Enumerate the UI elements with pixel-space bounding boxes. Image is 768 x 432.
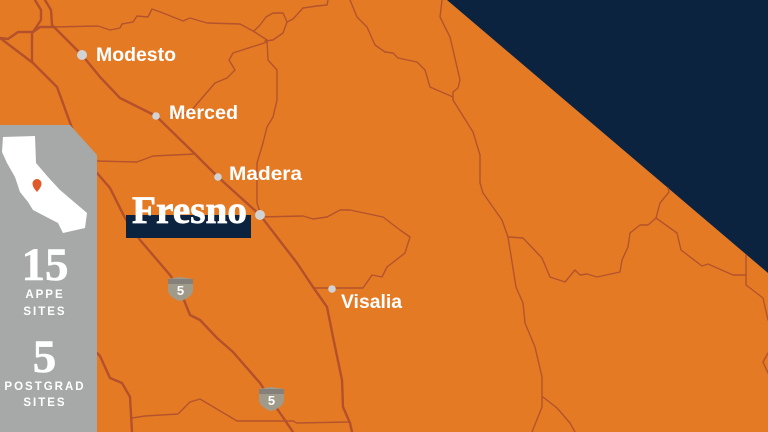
city: Fresno: Fresno [132,189,247,232]
navy region outside the map [447,0,768,273]
stat: 15 APPE sites: 15 [22,239,68,291]
stat: 5 postgrad sites: 5 [33,331,56,383]
city: Modesto: Modesto [96,45,176,66]
panel: site counts [0,125,97,432]
city: Visalia [328,285,402,313]
icon: California outline with pin [2,136,87,233]
city: Visalia: Visalia [341,292,402,313]
stat: 15 APPE sites: APPE [25,289,65,301]
major highways [0,0,352,432]
stat: 5 postgrad sites: SITES [23,397,67,409]
interstate 5 shield, south: 5 [268,393,275,408]
city: Madera: Madera [229,164,302,185]
stat: 15 APPE sites [22,239,68,318]
city: Merced: Merced [169,103,238,124]
interstate 5 shield, north [168,277,193,301]
stat: 15 APPE sites: SITES [23,306,67,318]
interstate 5 shield, north: 5 [177,283,184,298]
interstate 5 shield, south [259,387,284,411]
stat: 5 postgrad sites: POSTGRAD [4,381,86,393]
stat: 5 postgrad sites [4,331,86,409]
